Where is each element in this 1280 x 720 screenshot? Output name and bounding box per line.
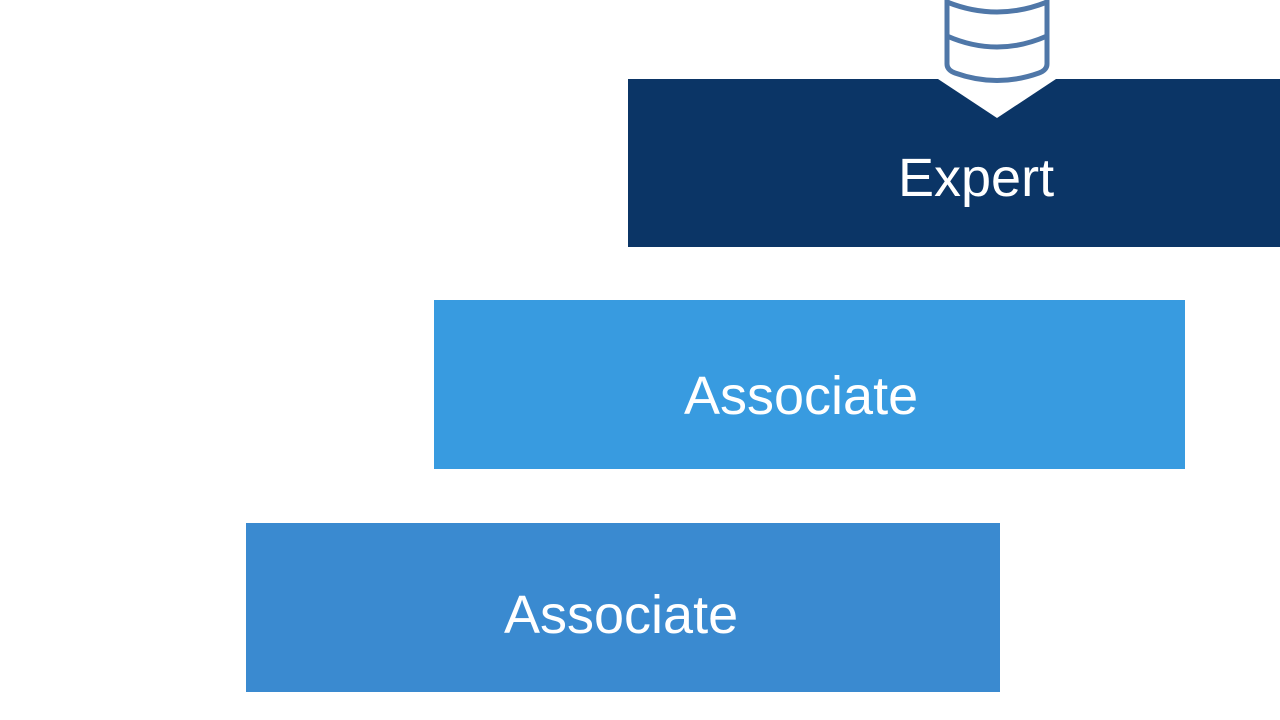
- heading: Associate: Associate: [684, 366, 918, 426]
- heading: Expert: Expert: [898, 148, 1054, 208]
- panel: associate bottom: [246, 523, 1000, 692]
- panel: expert: [628, 79, 1280, 247]
- panel: associate middle: [434, 300, 1185, 469]
- icon: database with notch: [938, 0, 1056, 118]
- heading: Associate: Associate: [504, 585, 738, 645]
